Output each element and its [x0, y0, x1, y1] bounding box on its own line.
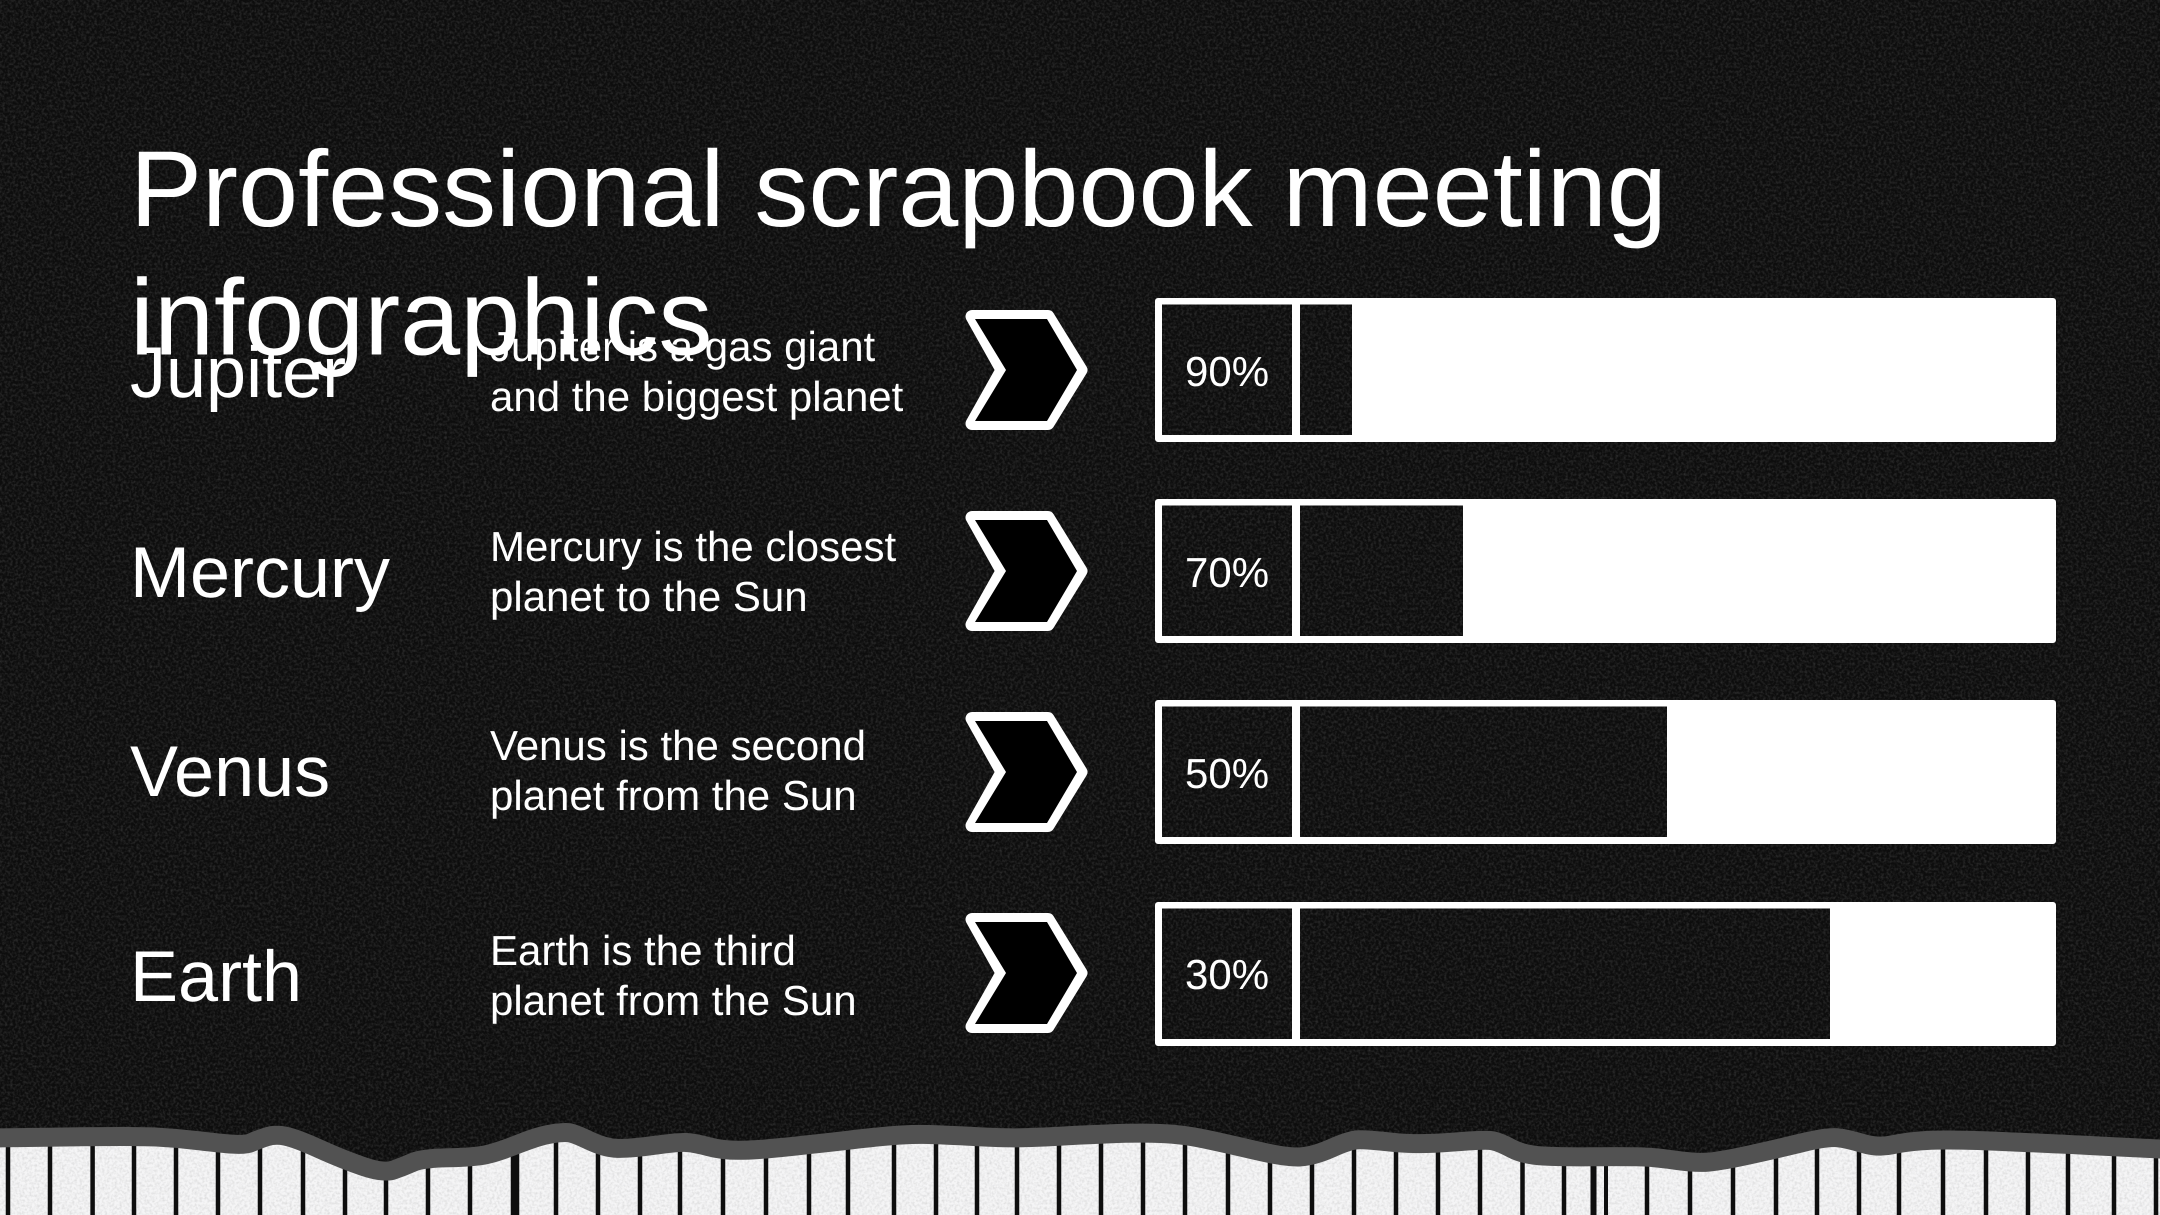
label: Venus: Venus [130, 732, 330, 812]
row: Venus [130, 700, 2056, 844]
progress bar: 70% [1155, 499, 2056, 643]
description: Jupiter: and the biggest planet [490, 373, 904, 420]
title: infographics [130, 256, 712, 378]
icon: chevron arrow [972, 316, 1081, 424]
description: Earth: planet from the Sun [490, 977, 857, 1024]
description: Earth: Earth is the third [490, 927, 796, 974]
row: Earth [130, 902, 2056, 1046]
description: Jupiter: Jupiter is a gas giant [490, 323, 876, 370]
progress bar: 50% [1155, 700, 2056, 844]
icon: chevron arrow [972, 718, 1081, 826]
icon: chevron arrow [972, 518, 1081, 624]
value: 70%: 70% [1185, 549, 1269, 596]
value: 50%: 50% [1185, 750, 1269, 797]
value: 90%: 90% [1185, 348, 1269, 395]
icon: chevron arrow [972, 920, 1081, 1026]
label: Mercury: Mercury [130, 533, 390, 613]
description: Venus: Venus is the second [490, 722, 866, 769]
progress bar: 30% [1155, 902, 2056, 1046]
row: Jupiter [130, 298, 2056, 442]
description: Mercury: Mercury is the closest [490, 523, 896, 570]
progress bar: 90% [1155, 298, 2056, 442]
row: Mercury [130, 499, 2056, 643]
value: 30%: 30% [1185, 951, 1269, 998]
title: Professional scrapbook meeting [130, 128, 1667, 249]
label: Jupiter: Jupiter [130, 333, 346, 413]
description: Venus: planet from the Sun [490, 772, 857, 819]
description: Mercury: planet to the Sun [490, 573, 808, 620]
label: Earth: Earth [130, 937, 302, 1017]
title [130, 128, 1667, 378]
torn notebook paper strip [0, 1120, 2160, 1215]
